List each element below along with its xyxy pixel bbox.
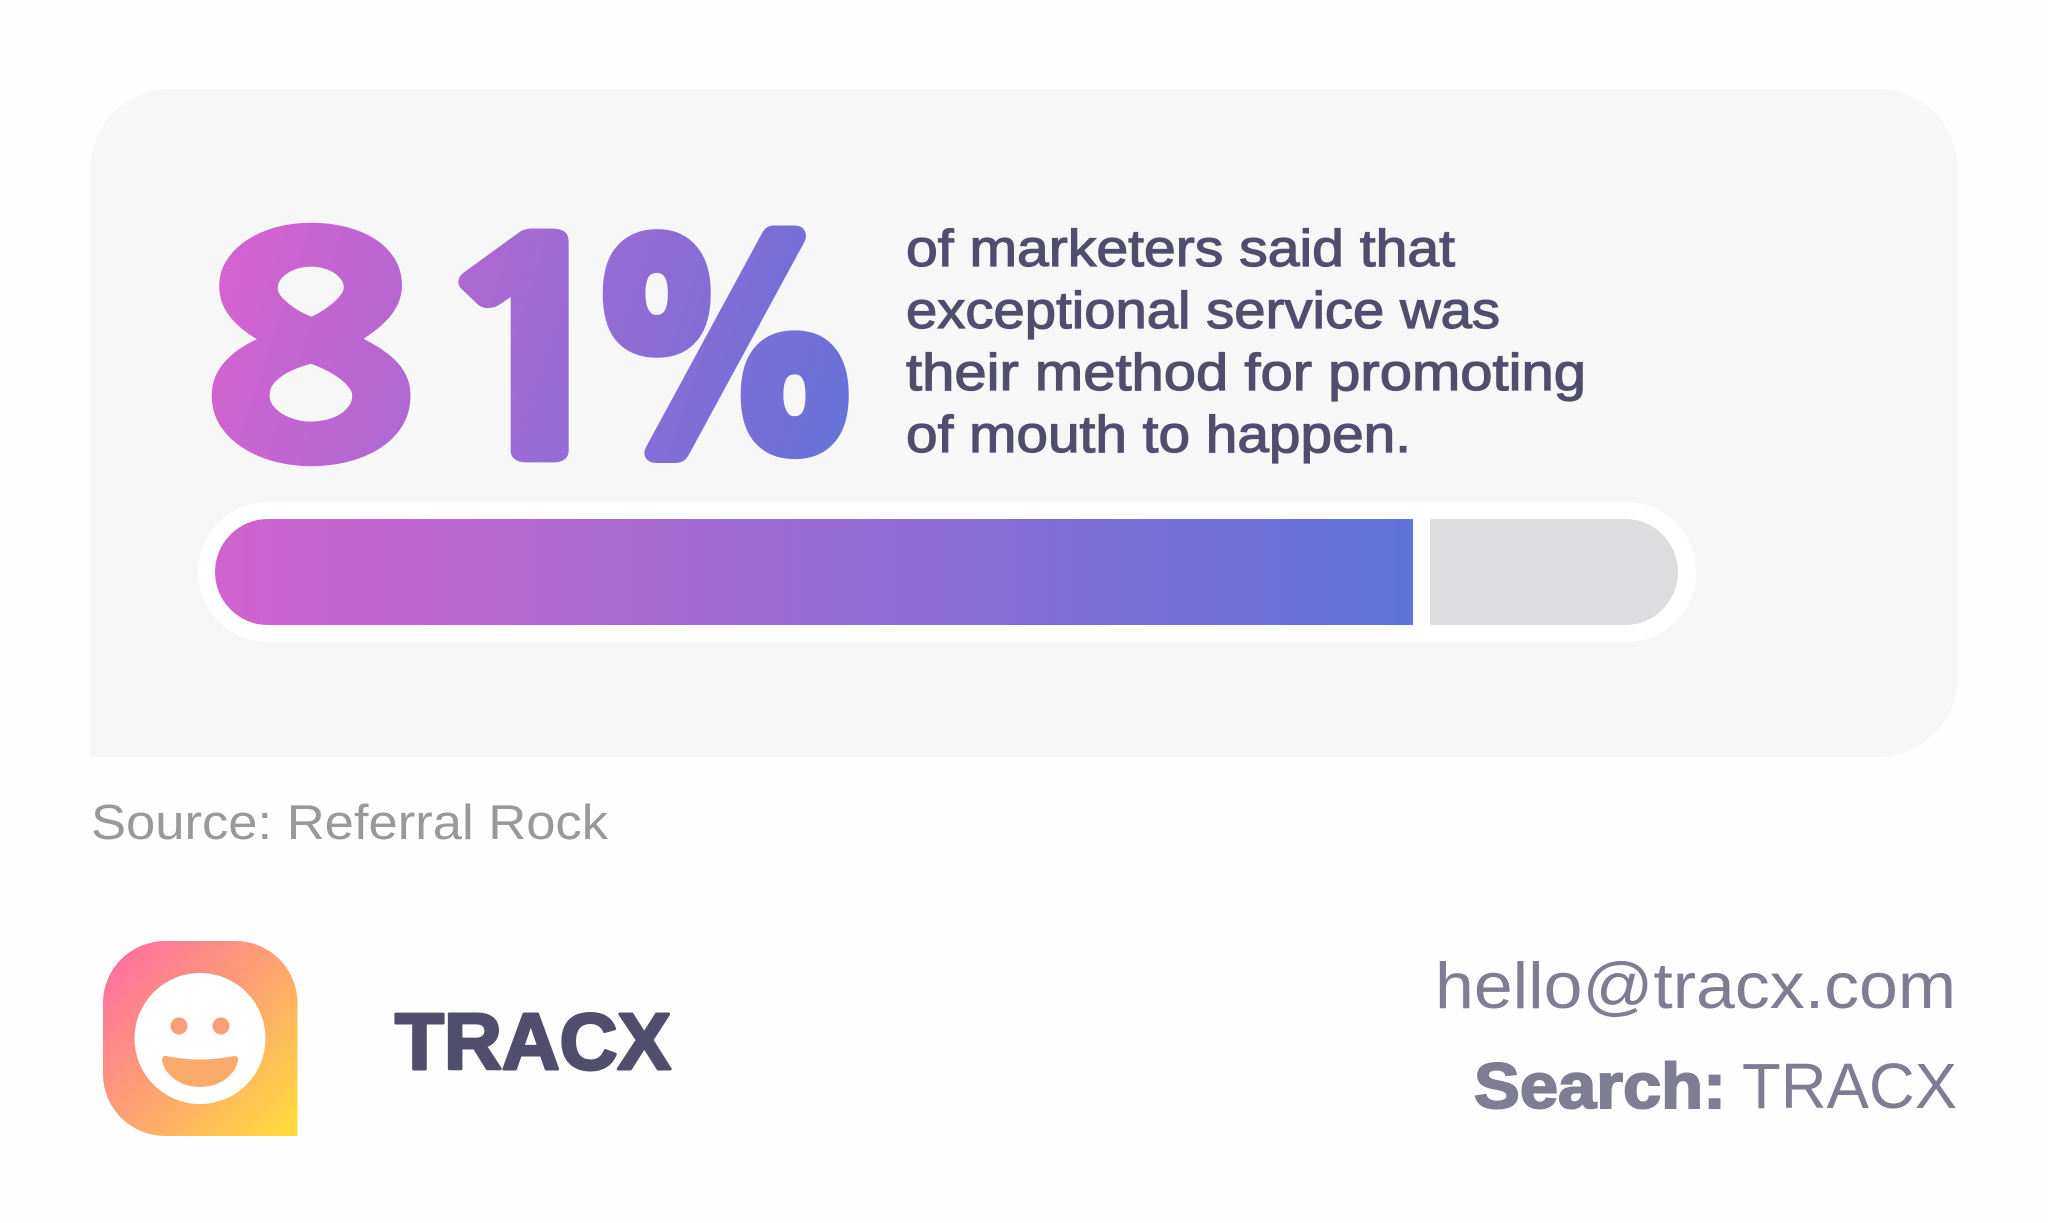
description text <box>906 220 1586 464</box>
big number: 81%: 1 <box>421 212 642 497</box>
progress bar: 81 percent <box>198 502 1696 642</box>
big number: 81%: % <box>580 220 872 492</box>
description text: their method for promoting <box>906 344 1586 402</box>
contact details: Search: <box>1474 1050 1726 1122</box>
source note: Source: Referral Rock <box>91 796 609 850</box>
contact details: TRACX <box>1742 1050 1957 1122</box>
panel: statistic <box>90 89 1958 757</box>
contact details <box>1435 949 1957 1122</box>
description text: exceptional service was <box>906 282 1500 340</box>
progress remainder <box>1430 519 1678 625</box>
description text: of marketers said that <box>906 220 1456 278</box>
description text: of mouth to happen. <box>906 406 1411 464</box>
contact details: hello@tracx.com <box>1435 949 1956 1022</box>
big number: 81%: 8 <box>202 208 417 500</box>
progress fill <box>215 519 1413 625</box>
icon: smiley logo <box>103 941 298 1136</box>
brand name: TRACX <box>395 997 671 1086</box>
